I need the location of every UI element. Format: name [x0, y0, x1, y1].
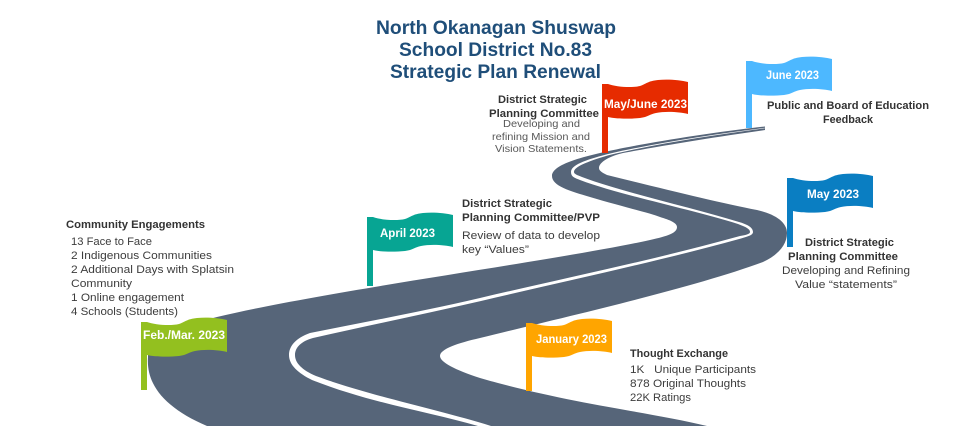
- text block: District Strategic Planning Committee, value statements: Planning Committee: [788, 251, 898, 263]
- text block: District Strategic Planning Committee, mission and vision: Developing and: [503, 118, 580, 130]
- text block: District Strategic Planning Committee, value statements: [782, 237, 910, 291]
- flag: May 2023: [787, 174, 873, 247]
- text block: District Strategic Planning Committee, value statements: Value “statements”: [795, 279, 897, 291]
- flag: June 2023: June 2023: [766, 70, 819, 82]
- text block: District Strategic Planning Committee, value statements: Developing and Refining: [782, 265, 910, 277]
- text block: Thought Exchange: Thought Exchange: [630, 348, 728, 360]
- flag: May/June 2023: May/June 2023: [604, 99, 687, 111]
- text block: Community Engagements: 2 Indigenous Communities: [71, 250, 213, 262]
- text block: District Strategic Planning Committee, mission and vision: District Strategic: [498, 94, 587, 106]
- text block: District Strategic Planning Committee/PVP: District Strategic: [462, 198, 552, 210]
- text block: District Strategic Planning Committee, mission and vision: Planning Committee: [489, 108, 599, 120]
- text block: District Strategic Planning Committee, mission and vision: refining Mission and: [492, 131, 590, 143]
- flag: January 2023: January 2023: [536, 334, 607, 346]
- flag: May/June 2023: [602, 80, 688, 153]
- flag: June 2023: [746, 57, 832, 128]
- text block: Community Engagements: Community: [71, 278, 133, 290]
- text block: Community Engagements: [66, 219, 234, 318]
- text block: Community Engagements: 4 Schools (Students): [71, 306, 178, 318]
- title: School District No.83: [399, 39, 592, 61]
- text block: Community Engagements: 1 Online engagement: [71, 292, 184, 304]
- flag: April 2023: [367, 213, 453, 286]
- text block: District Strategic Planning Committee, value statements: District Strategic: [805, 237, 894, 249]
- flag: Feb./Mar. 2023: Feb./Mar. 2023: [143, 330, 225, 342]
- text block: Thought Exchange: 1K Unique Participants: [630, 364, 757, 376]
- text block: District Strategic Planning Committee, mission and vision: [489, 94, 599, 155]
- road centre line: [289, 128, 765, 426]
- text block: Thought Exchange: 22K Ratings: [630, 392, 691, 404]
- text block: Public and Board of Education Feedback: [767, 100, 929, 126]
- text block: District Strategic Planning Committee, mission and vision: Vision Statements.: [495, 143, 587, 155]
- flag: January 2023: [526, 319, 612, 391]
- winding road: [148, 126, 787, 426]
- text block: District Strategic Planning Committee/PVP: key “Values”: [462, 244, 529, 256]
- flag: April 2023: April 2023: [380, 228, 435, 240]
- road surface: [148, 126, 787, 426]
- flag: Feb./Mar. 2023: [141, 318, 227, 390]
- title: [376, 17, 616, 83]
- title: North Okanagan Shuswap: [376, 17, 616, 39]
- text block: Thought Exchange: 878 Original Thoughts: [630, 378, 747, 390]
- text block: Community Engagements: 2 Additional Days with Splatsin: [71, 264, 234, 276]
- flag: May 2023: May 2023: [807, 189, 859, 201]
- text block: Public and Board of Education Feedback: Public and Board of Education: [767, 100, 929, 112]
- text block: Community Engagements: Community Engagements: [66, 219, 205, 231]
- text block: Public and Board of Education Feedback: Feedback: [823, 114, 874, 126]
- text block: District Strategic Planning Committee/PVP: Review of data to develop: [462, 230, 600, 242]
- text block: District Strategic Planning Committee/PVP: [462, 198, 600, 256]
- text block: District Strategic Planning Committee/PVP: Planning Committee/PVP: [462, 212, 600, 224]
- text block: Community Engagements: 13 Face to Face: [71, 236, 152, 248]
- text block: Thought Exchange: [630, 348, 757, 404]
- title: Strategic Plan Renewal: [390, 61, 601, 83]
